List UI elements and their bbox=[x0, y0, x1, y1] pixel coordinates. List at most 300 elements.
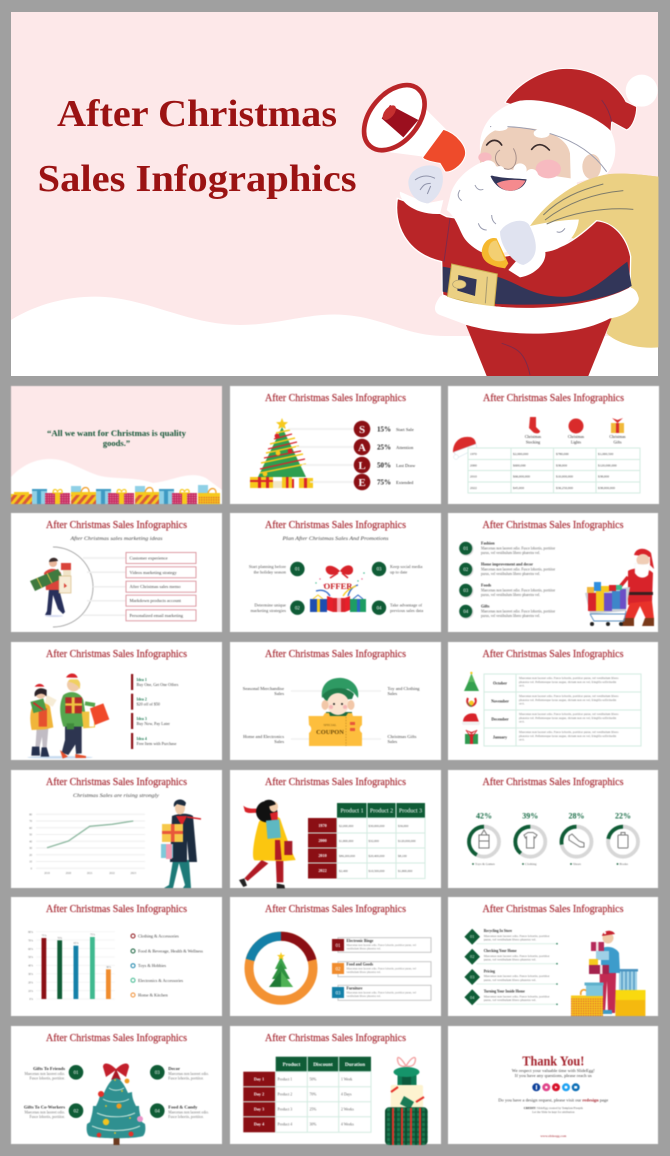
icon: ornament ball bbox=[568, 418, 584, 434]
table: Product 2 bbox=[370, 808, 393, 814]
table: Day 4 bbox=[254, 1122, 265, 1126]
numbered badges: 02 bbox=[295, 606, 300, 611]
labels: Sales bbox=[388, 691, 397, 696]
numbered list bbox=[459, 540, 556, 619]
numbered list: Home improvement and decor bbox=[481, 562, 533, 566]
title: After Christmas Sales Infographics bbox=[265, 520, 406, 531]
numbered list: 04 bbox=[463, 610, 469, 615]
strategies text bbox=[249, 564, 423, 613]
chart: sales line: 20 bbox=[29, 854, 33, 857]
table: $86,200,000 bbox=[339, 854, 355, 859]
chart: category bars: 60% bbox=[28, 948, 34, 951]
numbered list: 02 bbox=[463, 568, 469, 573]
idea boxes bbox=[126, 552, 196, 621]
title: Sales Infographics bbox=[38, 158, 356, 200]
numbered list: 03 bbox=[463, 589, 469, 594]
table: December bbox=[491, 716, 509, 722]
labels: Sales bbox=[274, 739, 284, 744]
chart: category bars: 36% bbox=[106, 966, 112, 969]
credit lines bbox=[524, 1106, 583, 1114]
table: $38,000,000 bbox=[598, 486, 615, 491]
chart: category bars: 40% bbox=[28, 965, 34, 968]
labels: Sales bbox=[388, 739, 397, 744]
table: 1970 bbox=[470, 452, 477, 456]
numbered badges: 04 bbox=[155, 1109, 160, 1114]
idea boxes: Personalized email marketing bbox=[130, 613, 184, 618]
table: 2000 bbox=[318, 838, 327, 843]
table: Product 2 bbox=[278, 1092, 292, 1096]
numbered list: Maecenas non laoreet odio. Fusce lobortis, porttitor bbox=[481, 610, 556, 614]
chart: ring Books: 22% bbox=[615, 812, 631, 820]
table: $2,000,000 bbox=[513, 452, 529, 457]
chart: category bars: 75% bbox=[90, 934, 96, 936]
callout items: Maecenas non laoreet odio. Fusce lobortis, porttitor purus, vel bbox=[346, 968, 416, 970]
table: Product 4 bbox=[278, 1122, 292, 1126]
numbered badges: 01 bbox=[295, 568, 300, 573]
title: After Christmas bbox=[57, 93, 337, 135]
table: Maecenas non laoreet odio. Fusce lobortis, porttitor purus, vel vestibulum libero bbox=[519, 694, 619, 699]
callout items: Electronic Binge bbox=[346, 939, 374, 943]
chart: category bars bbox=[28, 931, 115, 1001]
chart: ring Books: Books bbox=[620, 862, 629, 866]
diamond list: Pricing bbox=[484, 969, 495, 973]
icon: candy bbox=[466, 698, 477, 707]
table: 30% bbox=[310, 1122, 317, 1126]
chart: sales line bbox=[29, 813, 145, 875]
chart: ring Clothing: Clothing bbox=[525, 862, 537, 866]
panel: marketing ideas slide bbox=[11, 513, 222, 632]
labels: Sales bbox=[274, 691, 284, 696]
gift category text: Maecenas non laoreet odio. bbox=[168, 1072, 209, 1076]
diamond list: Maecenas non laoreet odio. Fusce lobortis, porttitor bbox=[484, 954, 550, 959]
table bbox=[484, 674, 641, 746]
table: Product bbox=[283, 1062, 301, 1068]
table: 70% bbox=[310, 1092, 317, 1096]
callout items: 01 bbox=[336, 944, 341, 949]
diamond list: 02 bbox=[470, 954, 474, 959]
table: Maecenas non laoreet odio. Fusce lobortis, porttitor purus, vel vestibulum libero bbox=[519, 676, 619, 681]
quote text: goods.” bbox=[103, 438, 130, 448]
numbered list: Foods bbox=[481, 582, 492, 588]
credit lines: CREDIT: SlideEgg created by Template/Freepik bbox=[524, 1106, 583, 1110]
numbered badges bbox=[290, 562, 386, 615]
connector lines bbox=[291, 691, 381, 739]
table: $780,000 bbox=[556, 452, 569, 457]
legend bbox=[131, 934, 203, 998]
table: Product 1 bbox=[340, 808, 364, 814]
table: pharetra vel. Pellentesque lacus augue, dictum non ex vel, fringilla sollicitudin bbox=[519, 698, 617, 703]
table: $10,500,000 bbox=[368, 869, 385, 874]
gift category text: Fusce lobortis, porttitor. bbox=[168, 1076, 204, 1082]
chart: SALE rows: Attention bbox=[396, 445, 414, 450]
numbered list: purus, vel vestibulum libero pharetra vel. bbox=[481, 593, 540, 598]
numbered badges: 03 bbox=[155, 1071, 160, 1076]
title bbox=[38, 93, 356, 200]
numbered badges: 01 bbox=[74, 1071, 79, 1076]
numbered list: purus, vel vestibulum libero pharetra vel. bbox=[481, 551, 540, 556]
icon: santa pushing shopping cart bbox=[585, 549, 654, 626]
chart: ring Shoes bbox=[562, 812, 592, 866]
strategies text: up to date bbox=[390, 570, 407, 574]
gift category text: Gifts To Friends bbox=[33, 1066, 65, 1071]
icon: gift bbox=[465, 730, 478, 744]
panel: thank you slide bbox=[448, 1026, 658, 1144]
panel: tree with gifts list slide bbox=[11, 1026, 222, 1145]
callout items: Maecenas non laoreet odio. Fusce lobortis, porttitor purus, vel bbox=[346, 944, 416, 947]
table: Duration bbox=[345, 1062, 365, 1068]
website url: www.slideegg.com bbox=[540, 1134, 567, 1138]
panel: product table with woman slide bbox=[230, 770, 441, 888]
subtitle: After Christmas sales marketing ideas bbox=[69, 537, 163, 542]
chart: ring Clothing bbox=[515, 812, 545, 866]
icon: woman in yellow coat bbox=[239, 800, 296, 888]
panel: coupon elf slide bbox=[230, 642, 441, 760]
credit lines: Let the Slide be kept for attribution bbox=[532, 1110, 575, 1114]
strategies text: Determine unique bbox=[254, 602, 286, 608]
table: $8,100 bbox=[398, 854, 407, 859]
diamond list: purus, vel vestibulum libero pharetra vel. bbox=[484, 958, 536, 963]
chart: sales line: 30 bbox=[29, 847, 33, 850]
legend: Home & Kitchen bbox=[138, 992, 168, 998]
icon: elf holding coupon: COUPON bbox=[316, 729, 344, 736]
chart: category bars: 70% bbox=[57, 937, 63, 940]
table: Product 3 bbox=[278, 1108, 292, 1112]
table: Day 3 bbox=[254, 1106, 264, 1112]
callout items: Furniture bbox=[346, 986, 363, 990]
legend: Clothing & Accessories bbox=[138, 934, 179, 938]
idea bars and labels: Free Item with Purchase bbox=[136, 741, 177, 746]
title: After Christmas Sales Infographics bbox=[46, 904, 187, 915]
diamond list: purus, vel vestibulum libero pharetra vel. bbox=[484, 978, 536, 983]
column labels: Christmas bbox=[525, 434, 542, 439]
table bbox=[243, 1057, 371, 1132]
table: Discount bbox=[313, 1062, 333, 1068]
diamond list: Checking Your Home bbox=[484, 949, 517, 953]
table: 2010 bbox=[470, 474, 477, 478]
panel: monthly table slide bbox=[448, 642, 658, 760]
chart: sales line: 2021 bbox=[87, 872, 93, 875]
table: 2022 bbox=[470, 486, 477, 490]
gift category text: Maecenas non laoreet odio. bbox=[24, 1110, 65, 1114]
table: 50% bbox=[310, 1078, 317, 1082]
diamond list: Turning Your Inside Home bbox=[484, 990, 525, 994]
panel: donut chart slide bbox=[230, 897, 441, 1016]
chart: category bars: 80% bbox=[28, 931, 34, 934]
table: $20,400,000 bbox=[368, 854, 385, 859]
chart: sales line: 0 bbox=[31, 867, 33, 870]
legend: Electronics & Accessories bbox=[138, 978, 183, 983]
chart: SALE rows: 75% bbox=[377, 478, 391, 486]
labels: Christmas Gifts bbox=[388, 734, 417, 739]
idea bars and labels: Idea 1 bbox=[136, 678, 147, 682]
table: $38,000 bbox=[598, 474, 609, 480]
column labels: Stocking bbox=[526, 440, 540, 444]
table: 2 Weeks bbox=[341, 1108, 354, 1112]
table: 4 Days bbox=[341, 1092, 352, 1096]
table: 25% bbox=[310, 1108, 317, 1112]
icon: shopper carrying gifts bbox=[30, 558, 71, 617]
table: 2000 bbox=[470, 464, 477, 468]
title: After Christmas Sales Infographics bbox=[46, 777, 187, 788]
panel: quote slide bbox=[11, 386, 222, 504]
chart: ring Shoes: Shoes bbox=[573, 862, 582, 866]
table: $36,000 bbox=[398, 824, 409, 829]
column labels: Lights bbox=[571, 440, 582, 444]
diamond list bbox=[464, 929, 558, 1005]
gift category text: Maecenas non laoreet odio. bbox=[24, 1072, 65, 1076]
idea bars and labels bbox=[131, 674, 179, 749]
subtitle: Christmas Sales are rising strongly bbox=[73, 794, 160, 799]
icon: decorated blue tree bbox=[87, 1063, 145, 1145]
table: $36,250,000 bbox=[556, 486, 573, 491]
chart: SALE rows: A bbox=[358, 442, 366, 454]
diamond list: Maecenas non laoreet odio. Fusce lobortis, porttitor bbox=[484, 974, 550, 979]
snow wave bbox=[11, 297, 658, 376]
icon: stacked gift boxes bbox=[385, 1057, 428, 1145]
chart: category bars: 65% bbox=[74, 942, 79, 945]
title: After Christmas Sales Infographics bbox=[483, 393, 624, 404]
table: Product 1 bbox=[278, 1078, 292, 1082]
diamond list: 04 bbox=[470, 995, 475, 1000]
gift category text: Fusce lobortis, porttitor. bbox=[30, 1076, 65, 1082]
chart: category bars: 70% bbox=[28, 939, 34, 942]
chart: SALE rows: Extended bbox=[396, 480, 414, 485]
table: Day 2 bbox=[254, 1092, 264, 1096]
gift category text: Gifts To Co-Workers bbox=[24, 1104, 65, 1110]
chart: SALE rows: Start Sale bbox=[396, 427, 414, 432]
table: $1,800,000 bbox=[339, 839, 354, 844]
idea bars and labels: Buy Now, Pay Later bbox=[136, 721, 171, 727]
numbered list: Maecenas non laoreet odio. Fusce lobortis, porttitor bbox=[481, 568, 556, 572]
column labels: Gifts bbox=[614, 440, 622, 444]
table: Day 1 bbox=[254, 1076, 264, 1082]
icon: man with gifts bbox=[161, 800, 201, 888]
numbered badges: 03 bbox=[376, 568, 382, 573]
chart: SALE rows: Last Draw bbox=[396, 463, 416, 468]
column labels: Christmas bbox=[568, 434, 585, 439]
table: pharetra vel. Pellentesque lacus augue, dictum non ex vel, fringilla sollicitudin bbox=[519, 734, 617, 739]
table: November bbox=[491, 698, 509, 704]
icon: tree bbox=[464, 672, 479, 691]
panel: diamond list slide bbox=[448, 897, 658, 1016]
chart: category bars: 50% bbox=[28, 956, 34, 959]
chart: ring Toys and Games: 42% bbox=[476, 812, 492, 820]
table: January bbox=[493, 734, 507, 740]
gift category text: Fusce lobortis, porttitor. bbox=[168, 1115, 204, 1120]
design request line: Do you have a design request, please visit our redesign page bbox=[498, 1097, 608, 1103]
numbered badges bbox=[69, 1065, 165, 1118]
connector lines bbox=[83, 558, 126, 615]
chart: SALE rows: S bbox=[359, 424, 365, 436]
labels: Seasonal Merchandise bbox=[243, 686, 284, 691]
icon: gift box bbox=[611, 418, 624, 433]
diamond list: 03 bbox=[470, 974, 475, 980]
chart: category bars: 75% bbox=[42, 934, 47, 938]
title: After Christmas Sales Infographics bbox=[46, 520, 187, 531]
gift category text: Food & Candy bbox=[168, 1104, 198, 1110]
panel: discount table slide bbox=[230, 1026, 441, 1145]
gift category text: Decor bbox=[168, 1066, 180, 1071]
icon: santa hat bbox=[453, 437, 477, 459]
callout items bbox=[332, 938, 431, 1000]
idea bars and labels: Idea 3 bbox=[136, 717, 147, 721]
numbered list: Maecenas non laoreet odio. Fusce lobortis, porttitor bbox=[481, 546, 556, 552]
labels: Home and Electronics bbox=[243, 734, 284, 739]
numbered list: purus, vel vestibulum libero pharetra vel. bbox=[481, 572, 540, 577]
chart: sales line: 70 bbox=[29, 820, 33, 823]
callout items: 02 bbox=[336, 968, 341, 972]
chart: ring Books bbox=[608, 812, 638, 866]
chart: sales line: 50 bbox=[29, 834, 33, 836]
callout items: vestibulum libero pharetra vel. bbox=[346, 995, 381, 998]
title: After Christmas Sales Infographics bbox=[482, 520, 624, 531]
table: pharetra vel. Pellentesque lacus augue, dictum non ex vel, fringilla sollicitudin bbox=[519, 716, 617, 721]
chart: SALE rows: 50% bbox=[377, 462, 391, 470]
callout items: Food and Goods bbox=[346, 962, 374, 966]
callout items: 03 bbox=[336, 992, 341, 996]
idea bars and labels: Idea 4 bbox=[136, 737, 147, 741]
table: orci. bbox=[519, 702, 525, 706]
labels bbox=[243, 686, 420, 744]
callout items: vestibulum libero pharetra vel. bbox=[346, 947, 381, 950]
table: orci. bbox=[519, 684, 525, 688]
idea bars and labels: Idea 2 bbox=[136, 698, 147, 702]
title: After Christmas Sales Infographics bbox=[482, 649, 624, 660]
callout items: Maecenas non laoreet odio. Fusce lobortis, porttitor purus, vel bbox=[346, 992, 416, 994]
chart: sales line: 2020 bbox=[66, 872, 72, 875]
title: After Christmas Sales Infographics bbox=[265, 393, 406, 404]
panel: ideas with shoppers slide bbox=[11, 642, 222, 760]
table bbox=[468, 448, 640, 493]
chart: SALE rows: L bbox=[358, 460, 366, 472]
chart: SALE rows: E bbox=[358, 477, 366, 489]
quote text bbox=[47, 428, 187, 448]
strategies text: Start planning before bbox=[249, 564, 286, 569]
icon: couple with shopping bags bbox=[27, 673, 109, 759]
chart: ring Toys and Games bbox=[469, 812, 499, 866]
chart: category bars: 20% bbox=[28, 981, 34, 984]
diamond list: purus, vel vestibulum libero pharetra vel. bbox=[484, 998, 536, 1003]
diamond list: 01 bbox=[470, 934, 474, 939]
chart: SALE rows: 25% bbox=[377, 444, 391, 452]
chart: sales line: 2023 bbox=[131, 872, 137, 875]
table: $38,000 bbox=[556, 464, 567, 468]
icon: green tree bbox=[269, 952, 293, 987]
table: $66,000,000 bbox=[513, 474, 530, 480]
legend: Food & Beverage, Health & Wellness bbox=[138, 948, 203, 954]
icon: christmas tree with gifts bbox=[250, 418, 313, 488]
chart: category bars: 10% bbox=[28, 990, 34, 993]
thank you message: If you have any questions, please reach us bbox=[515, 1073, 592, 1079]
idea bars and labels: $20 off of $50 bbox=[136, 702, 160, 706]
table: $600,000 bbox=[513, 464, 526, 468]
table: 1970 bbox=[318, 823, 327, 828]
thank you message bbox=[512, 1068, 595, 1079]
table: 4 Weeks bbox=[341, 1122, 354, 1126]
strategies text: Take advantage of bbox=[390, 602, 423, 608]
icon: social media row bbox=[532, 1083, 580, 1091]
table bbox=[308, 803, 425, 878]
panel: SALE tree slide bbox=[230, 386, 441, 504]
labels: Toy and Clothing bbox=[388, 686, 420, 691]
table: Maecenas non laoreet odio. Fusce lobortis, porttitor purus, vel vestibulum libero bbox=[519, 730, 619, 735]
chart: sales line: 2019 bbox=[44, 872, 50, 875]
idea boxes: Customer experience bbox=[130, 556, 168, 560]
subtitle: Plan After Christmas Sales And Promotions bbox=[281, 537, 389, 542]
chart: sales line: 60 bbox=[29, 827, 33, 830]
table: $120,000,000 bbox=[598, 464, 617, 468]
numbered list: Gifts bbox=[481, 604, 490, 608]
numbered badges: 04 bbox=[376, 606, 382, 611]
title: After Christmas Sales Infographics bbox=[265, 1033, 406, 1044]
legend: Toys & Hobbies bbox=[138, 963, 166, 968]
idea boxes: Markdown products account bbox=[130, 598, 182, 603]
thank you message: We respect your valuable time with SlideEgg! bbox=[512, 1068, 595, 1073]
quote text: “All we want for Christmas is quality bbox=[47, 428, 187, 438]
table: 1 Week bbox=[341, 1078, 352, 1082]
chart: ring Shoes: 28% bbox=[568, 812, 584, 820]
table: $45,000 bbox=[513, 486, 524, 491]
icon: offer gift boxes bbox=[310, 565, 366, 612]
strategies text: marketing strategies bbox=[251, 608, 286, 613]
table: $10,000,000 bbox=[556, 474, 573, 480]
icon: elf holding coupon bbox=[308, 678, 362, 746]
numbered list: Fashion bbox=[481, 540, 495, 546]
panel: cover slide bbox=[11, 12, 658, 376]
table: $120,000,000 bbox=[398, 839, 416, 844]
table: $1,800,000 bbox=[398, 869, 413, 874]
title: After Christmas Sales Infographics bbox=[482, 904, 624, 915]
arc bbox=[53, 547, 93, 627]
column labels bbox=[525, 434, 626, 444]
table: orci. bbox=[519, 720, 525, 724]
chart: SALE rows bbox=[288, 421, 416, 490]
table: $30,000,000 bbox=[368, 824, 385, 829]
idea boxes: After Christmas sales memo bbox=[130, 584, 181, 589]
chart: category bars: 30% bbox=[28, 973, 34, 976]
chart: SALE rows: 15% bbox=[377, 426, 391, 434]
table: $2,400 bbox=[339, 869, 348, 874]
icon: man carrying gifts with boxes bbox=[571, 931, 645, 1016]
gift category text bbox=[24, 1066, 209, 1120]
idea boxes: Videos marketing strategy bbox=[130, 570, 177, 575]
icon: santa with megaphone and sack bbox=[352, 68, 658, 376]
gift category text: Maecenas non laoreet odio. bbox=[168, 1110, 209, 1114]
numbered badges: 02 bbox=[74, 1109, 79, 1114]
title: After Christmas Sales Infographics bbox=[265, 777, 406, 788]
table: orci. bbox=[519, 738, 525, 742]
title: After Christmas Sales Infographics bbox=[265, 904, 406, 915]
title: After Christmas Sales Infographics bbox=[46, 1033, 187, 1044]
chart: ring Clothing: 39% bbox=[522, 812, 538, 820]
numbered list: Maecenas non laoreet odio. Fusce lobortis, porttitor bbox=[481, 588, 556, 594]
panel: line chart slide bbox=[11, 770, 222, 888]
table: October bbox=[493, 680, 507, 686]
panel: bar chart slide bbox=[11, 897, 222, 1016]
table: pharetra vel. Pellentesque lacus augue, dictum non ex vel, fringilla sollicitudin bbox=[519, 680, 617, 685]
callout items: vestibulum libero pharetra vel. bbox=[346, 971, 381, 974]
gift category text: Fusce lobortis, porttitor. bbox=[30, 1115, 65, 1120]
chart: sales line: 80 bbox=[29, 813, 33, 816]
chart: sales line: 40 bbox=[29, 840, 33, 843]
title: After Christmas Sales Infographics bbox=[265, 649, 406, 660]
panel: product table slide bbox=[448, 386, 659, 504]
diamond list: purus, vel vestibulum libero pharetra vel. bbox=[484, 938, 536, 943]
column labels: Christmas bbox=[609, 434, 626, 439]
table: $1,000,500 bbox=[598, 452, 614, 457]
table: Product 3 bbox=[399, 808, 422, 814]
icon: stocking bbox=[529, 417, 540, 433]
